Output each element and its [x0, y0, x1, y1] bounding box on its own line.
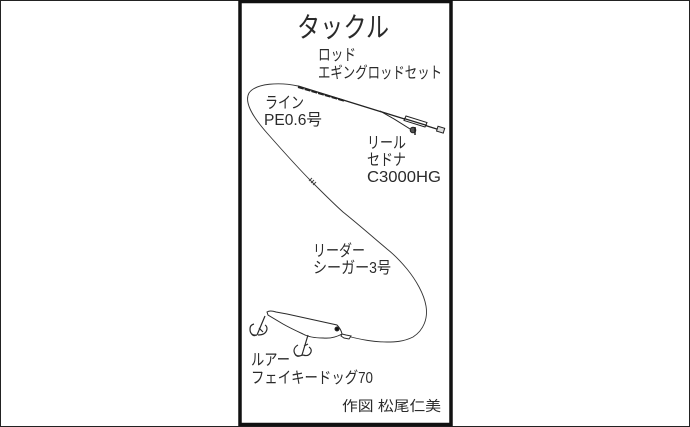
label: line: [264, 95, 322, 129]
icon: lure: [250, 311, 351, 356]
fishing line and leader: [248, 84, 426, 342]
label: rod: ロッド: [318, 47, 356, 64]
lure eye: [335, 327, 339, 331]
label: leader: シーガー3号: [313, 259, 391, 277]
panel: tackle frame: [240, 2, 451, 424]
lure body: [267, 311, 342, 338]
label: rod: エギングロッドセット: [318, 64, 442, 82]
snap: [341, 334, 351, 339]
front hook: [294, 335, 311, 356]
label: leader: リーダー: [313, 242, 365, 260]
label: leader: [313, 242, 391, 277]
label: lure: ルアー: [251, 352, 290, 369]
rear hook: [250, 316, 267, 336]
label: line: PE0.6号: [264, 111, 322, 129]
label: rod: [318, 47, 442, 82]
label: lure: [251, 352, 373, 387]
label: reel: リール: [367, 135, 406, 152]
label: lure: フェイキードッグ70: [251, 369, 373, 387]
label: reel: C3000HG: [367, 169, 441, 186]
label: reel: セドナ: [367, 152, 406, 169]
icon: rod and reel: [298, 86, 445, 135]
credit: 作図 松尾仁美: [342, 398, 441, 414]
title: タックル: [297, 12, 389, 43]
label: reel: [367, 135, 441, 186]
knot: [309, 178, 316, 185]
label: line: ライン: [265, 95, 304, 112]
